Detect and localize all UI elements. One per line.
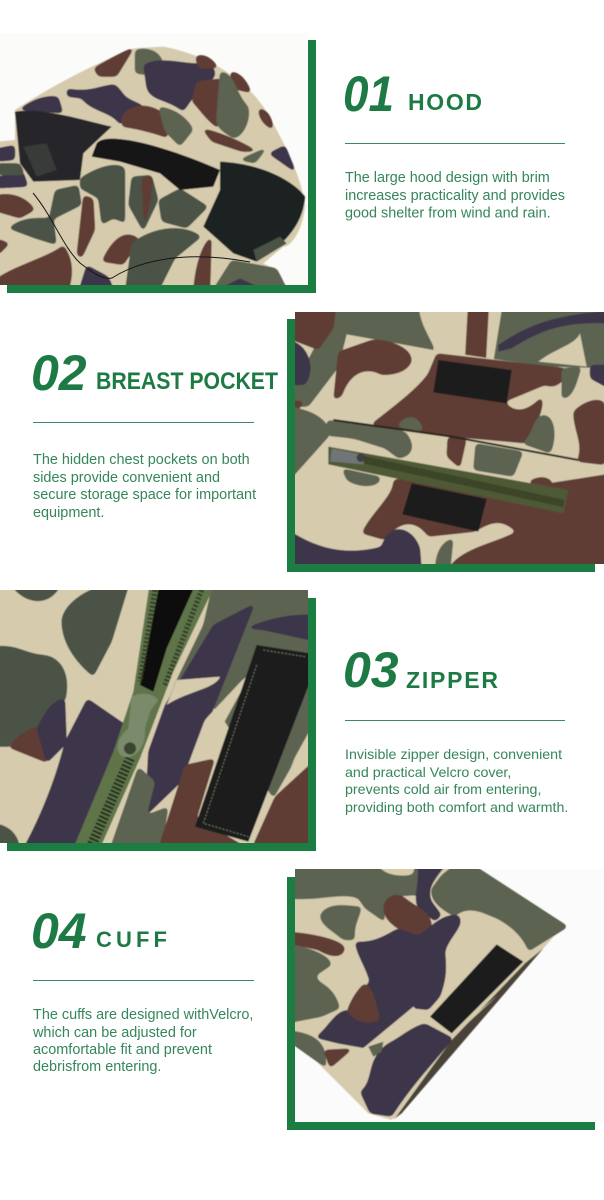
section text: 02 breast pocket [31,345,278,521]
body text: breast pocket: The hidden chest pockets on both [33,452,250,468]
body text: breast pocket: sides provide convenient and [33,470,220,486]
panel: zipper [0,582,317,851]
body text: zipper: providing both comfort and warmth. [345,800,568,816]
photo: sleeve cuff with velcro [295,869,567,1120]
section text: 04 cuff [31,903,254,1075]
photo: camouflage hood [0,33,308,292]
green frame: cuff photo [287,877,595,1130]
body text: cuff: acomfortable fit and prevent [33,1042,212,1058]
heading: breast pocket: BREAST POCKET [96,368,278,395]
body text: cuff: which can be adjusted for [32,1025,197,1041]
photo: chest pockets with zipper [288,302,604,572]
body text: hood: good shelter from wind and rain. [345,206,551,222]
number 03: 03 [343,642,399,698]
body text: hood: The large hood design with brim [345,170,550,186]
number 02: 02 [31,345,87,401]
body text: hood: increases practicality and provides [345,188,565,204]
green frame: zipper photo [7,598,316,851]
body text: breast pocket: equipment. [33,505,104,521]
body text: cuff: debrisfrom entering. [33,1059,161,1075]
body text: breast pocket: secure storage space for important [33,487,256,503]
number 04: 04 [31,903,87,959]
panel: breast pocket [287,302,604,572]
heading: cuff: CUFF [96,927,167,952]
heading: zipper: ZIPPER [406,667,498,693]
body text: zipper: Invisible zipper design, convenient [345,747,562,763]
section text: 03 zipper [343,642,568,816]
green frame: pocket photo [287,319,595,572]
body text: zipper: and practical Velcro cover, [345,765,511,781]
body text: zipper: prevents cold air from entering, [345,782,541,798]
panel: cuff [287,858,604,1130]
number 01: 01 [343,66,394,122]
heading: hood: HOOD [408,89,482,115]
body text: cuff: The cuffs are designed withVelcro, [33,1007,253,1023]
photo: zipper and velcro cover [0,582,317,848]
panel: hood [0,33,316,293]
section text: 01 hood [343,66,565,222]
green frame: hood photo [7,40,316,293]
